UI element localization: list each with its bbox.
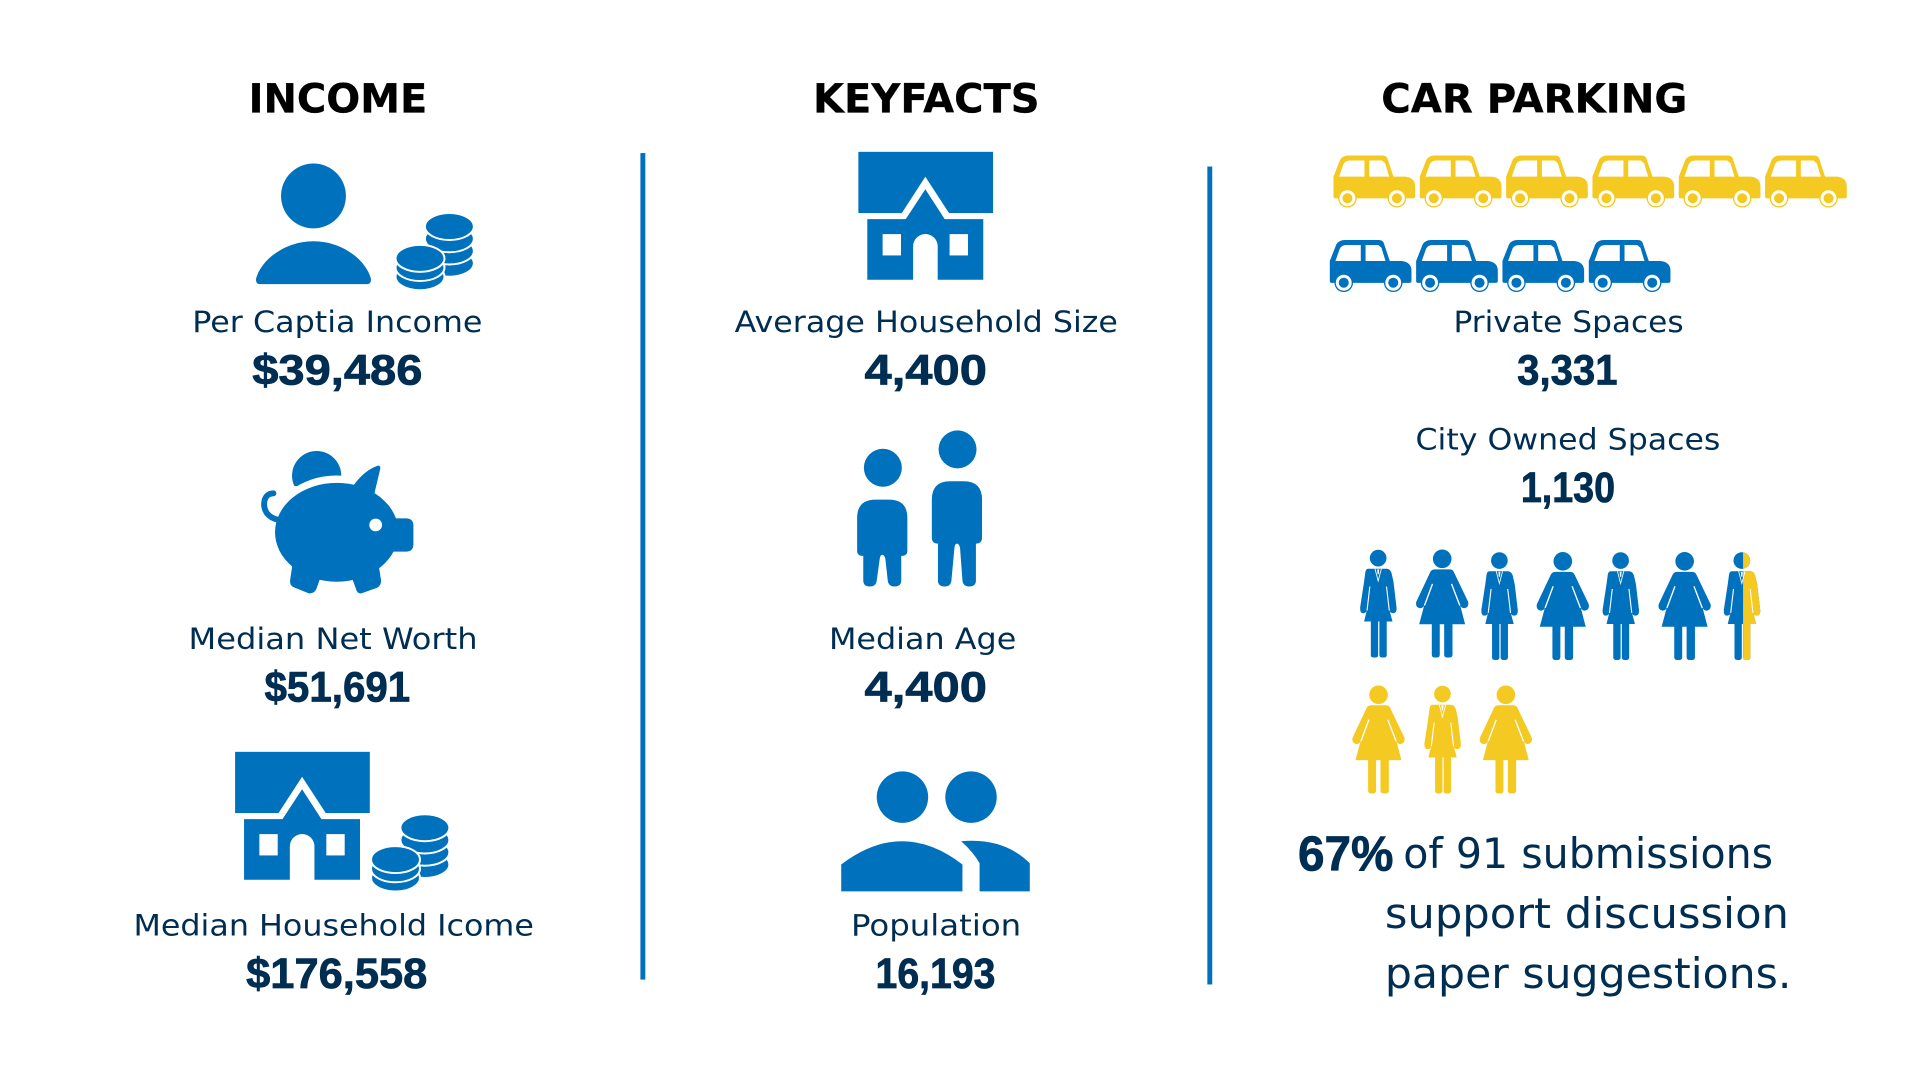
pictogram: yellow people row [1352, 685, 1532, 793]
label: median household income: Median Household Icome [133, 909, 534, 943]
icon: piggy bank [264, 451, 413, 593]
label: average household size: Average Household Size [735, 305, 1118, 339]
callout: submissions statement: of 91 submissions [1403, 829, 1773, 878]
heading: car parking: CAR PARKING [1381, 75, 1687, 123]
value: city owned spaces: 1,130 [1521, 464, 1615, 511]
heading: income: INCOME [249, 75, 427, 123]
label: population: Population [851, 909, 1021, 943]
label: median age: Median Age [829, 622, 1016, 656]
panel: keyfacts [735, 75, 1118, 997]
label: per capita income: Per Captia Income [192, 305, 482, 339]
value: per capita income: $39,486 [252, 346, 422, 393]
callout: submissions statement: support discussion [1385, 889, 1789, 938]
icon: two children [857, 430, 982, 587]
icon row: blue cars [1330, 240, 1670, 292]
pictogram: blue people row [1360, 550, 1760, 660]
icon: person with coins [256, 163, 474, 290]
icon row: yellow cars [1333, 156, 1847, 208]
value: median net worth: $51,691 [264, 664, 410, 711]
callout: submissions statement: 67% [1298, 828, 1393, 882]
value: median age: 4,400 [864, 664, 987, 711]
value: median household income: $176,558 [246, 950, 427, 997]
label: private spaces: Private Spaces [1453, 305, 1684, 339]
panel: car parking [1298, 75, 1847, 998]
callout: submissions statement: paper suggestions. [1385, 949, 1791, 998]
icon: house [858, 152, 993, 280]
icon: house with coins [235, 752, 449, 891]
value: private spaces: 3,331 [1517, 346, 1618, 393]
heading: keyfacts: KEYFACTS [813, 75, 1040, 123]
value: population: 16,193 [876, 950, 996, 997]
infographic [136, 82, 1847, 996]
panel: income [133, 75, 534, 997]
value: average household size: 4,400 [864, 346, 987, 393]
label: city owned spaces: City Owned Spaces [1416, 422, 1720, 456]
icon: two people [841, 771, 1030, 891]
label: median net worth: Median Net Worth [189, 622, 478, 656]
callout: submissions statement [1298, 828, 1791, 998]
